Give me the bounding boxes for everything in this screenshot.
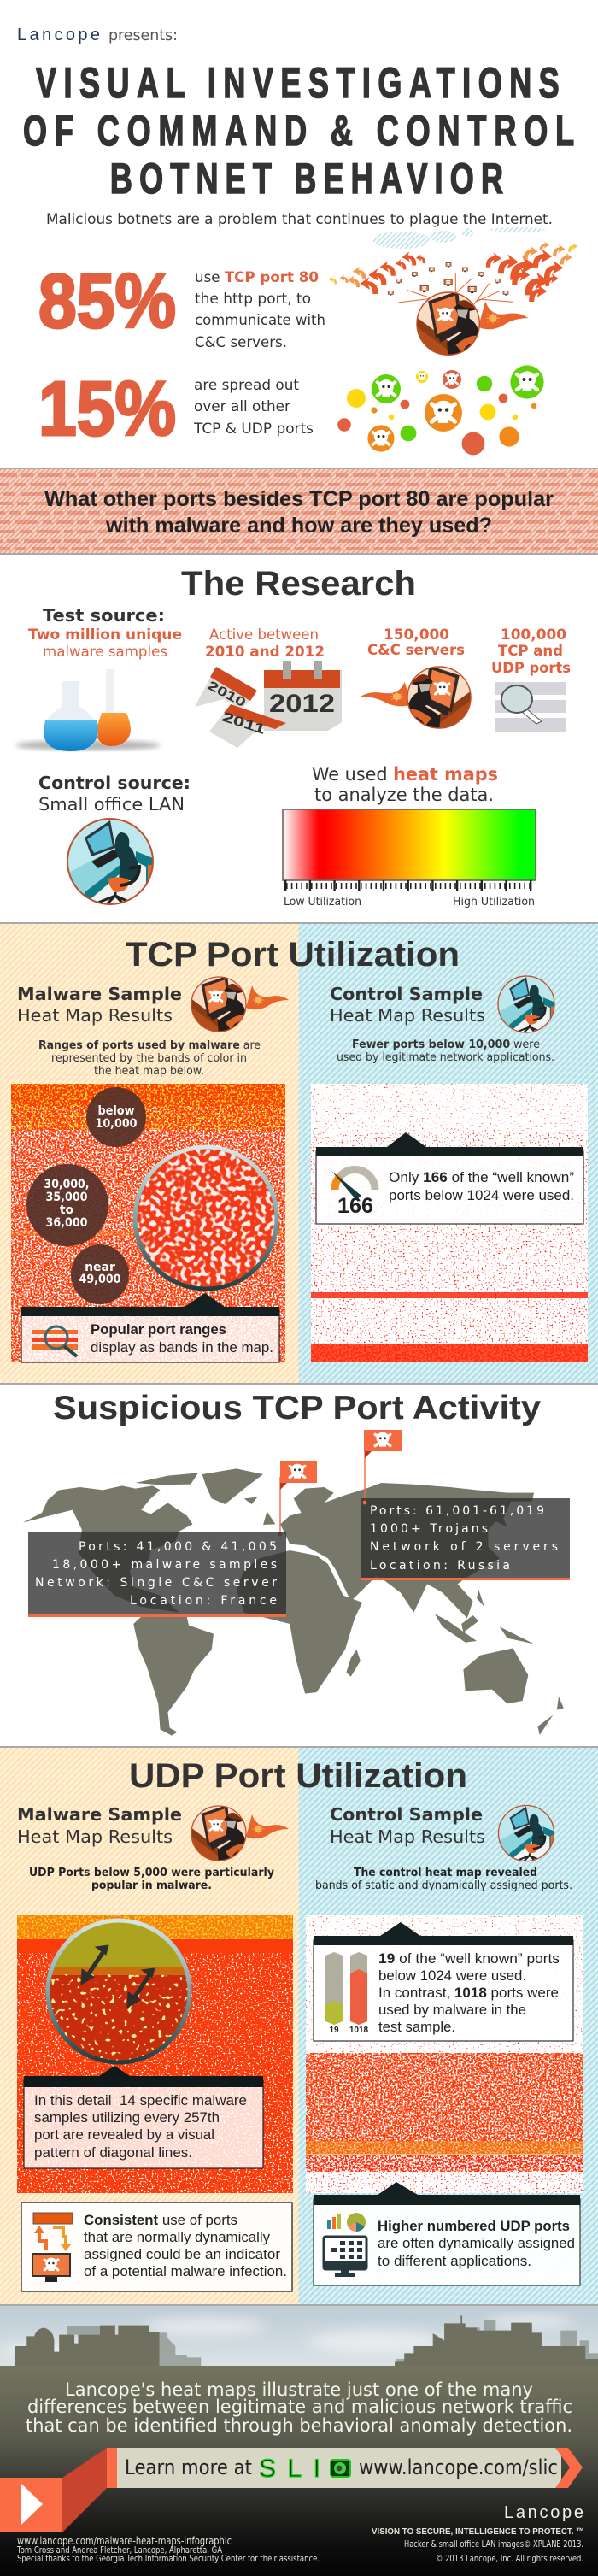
callout: 19 vs 1018 ports: test sample.: [378, 2020, 455, 2035]
malware description: [29, 1867, 274, 1892]
TCP UDP ports: UDP ports: [491, 660, 571, 677]
header: Lancope presents: Lancope: [17, 26, 100, 44]
callout: popular port ranges: Popular port ranges: [91, 1321, 226, 1338]
callout: higher numbered UDP ports: to different applications.: [378, 2254, 531, 2269]
test source: samples: malware samples: [43, 644, 167, 661]
bubble: 30,000 to 36,000: [26, 1164, 108, 1246]
icon: flasks: [15, 669, 161, 751]
stat: 15 percent: 15%: [38, 367, 176, 452]
stat: 85 percent: C&C servers.: [195, 334, 287, 351]
TCP UDP ports: TCP and: [498, 643, 563, 660]
icon: calendar pages: 2010: [205, 679, 248, 710]
stat: 15 percent: are spread out: [194, 377, 299, 394]
callout: France: [28, 1461, 317, 1617]
TCP UDP ports: [491, 626, 571, 677]
bubble: near 49,000: near: [85, 1261, 115, 1274]
bubble: near 49,000: 49,000: [79, 1273, 121, 1286]
title: BOTNET BEHAVIOR: [110, 156, 503, 203]
callout: popular port ranges: [21, 1293, 279, 1362]
heat map legend: [283, 764, 536, 909]
malware description: Ranges of ports used by malware are: [38, 1039, 261, 1052]
callout: France: Network: Single C&C server: [35, 1576, 277, 1590]
footer credits: [16, 2534, 320, 2564]
stat: 85 percent: the http port, to: [195, 291, 311, 308]
magnifier: diagonal pattern: [46, 1919, 191, 2064]
malware sample heading: Heat Map Results: [17, 1826, 173, 1847]
stat: 85 percent: 85%: [38, 259, 176, 344]
stat: 15 percent: over all other: [194, 398, 290, 415]
icon: botnet hacker with monitors and arrows: [328, 227, 577, 362]
dates: active between: Active between: [209, 626, 319, 644]
callout: France: Location: France: [130, 1594, 277, 1608]
heat map legend: High Utilization: [453, 896, 535, 909]
stat: 15 percent: TCP & UDP ports: [193, 421, 314, 438]
control sample heading: Heat Map Results: [330, 1826, 485, 1847]
control source: [38, 773, 191, 815]
callout: consistent use of ports: [21, 2203, 292, 2291]
footer branding: Lancope: [504, 2503, 583, 2522]
header: Lancope presents: [17, 26, 178, 44]
test source: samples: Test source:: [43, 605, 165, 626]
icon: calendar pages: [195, 661, 342, 748]
arrows: [81, 1945, 155, 2008]
callout: higher numbered UDP ports: Higher numbered UDP ports: [378, 2219, 570, 2234]
heat map: control UDP: [306, 1915, 583, 2193]
callout: diagonal lines: samples utilizing every 257th: [34, 2110, 220, 2126]
control description: The control heat map revealed: [354, 1867, 537, 1879]
callout: diagonal lines: [24, 2066, 263, 2168]
subtitle: Malicious botnets are a problem that continues to plague the Internet.: [46, 211, 553, 228]
closing statement: [26, 2379, 572, 2436]
stat: 85 percent: communicate with: [195, 312, 325, 329]
header: Lancope presents: presents:: [108, 26, 178, 44]
heading: UDP Port Utilization: UDP Port Utilization: [129, 1757, 467, 1795]
heat map legend: Low Utilization: [284, 896, 361, 909]
heading: Suspicious TCP Port Activity: Suspicious TCP Port Activity: [53, 1390, 541, 1426]
callout: Russia: 1000+ Trojans: [370, 1522, 488, 1536]
bubble: 30,000 to 36,000: 30,000,: [44, 1178, 89, 1191]
bar chart: 19 and 1018: [325, 1952, 369, 2035]
control sample heading: Control Sample: [330, 984, 483, 1004]
arrow banner: learn more: www.lancope.com/slic: [359, 2455, 558, 2479]
malware sample heading: Malware Sample: [17, 1804, 182, 1825]
C&C servers: 150,000: [384, 626, 449, 644]
control description: used by legitimate network applications.: [337, 1051, 554, 1064]
callout: consistent use of ports: that are normally dynamically: [84, 2230, 271, 2245]
control source: Control source:: [38, 773, 191, 793]
logo: SLIC: SLI: [259, 2455, 320, 2483]
footer branding: VISION TO SECURE, INTELLIGENCE TO PROTECT. ™: [372, 2526, 584, 2537]
bar chart: 19 and 1018: 19: [329, 2026, 339, 2035]
callout: diagonal lines: pattern of diagonal lines.: [34, 2145, 192, 2161]
C&C servers: C&C servers: [367, 642, 465, 659]
callout: 166 well known ports: Only 166 of the “well known”: [389, 1169, 574, 1185]
control sample heading: [330, 1804, 554, 1861]
malware description: the heat map below.: [94, 1065, 204, 1078]
icon: server to infected monitor: [32, 2213, 73, 2282]
malware description: UDP Ports below 5,000 were particularly: [29, 1867, 274, 1879]
control description: [337, 1038, 554, 1064]
icon: magnifier on ports: [495, 682, 566, 732]
malware sample heading: Heat Map Results: [17, 1005, 173, 1026]
heat map legend: We used heat maps: [312, 764, 498, 785]
arrow banner: learn more: Learn more at: [125, 2455, 252, 2479]
dates: active between: 2010 and 2012: [205, 644, 325, 661]
callout: popular port ranges: display as bands in the map.: [91, 1339, 273, 1356]
test source: samples: [28, 605, 182, 661]
callout: Russia: Ports: 61,001-61,019: [370, 1504, 544, 1518]
callout: consistent use of ports: Consistent use of ports: [84, 2213, 237, 2228]
callout: France: 18,000+ malware samples: [52, 1558, 277, 1572]
magnifier: heat map detail: [133, 1145, 278, 1291]
footer credits: Special thanks to the Georgia Tech Information Security Center for their assistance.: [17, 2554, 320, 2564]
stat: 85 percent: [38, 259, 325, 351]
control description: bands of static and dynamically assigned ports.: [315, 1879, 572, 1892]
footer branding: [372, 2503, 584, 2564]
heat map: malware TCP: [11, 1084, 285, 1362]
callout: Russia: Location: Russia: [370, 1559, 510, 1573]
banner: question: What other ports besides TCP port 80 are popular: [44, 487, 554, 511]
callout: diagonal lines: In this detail 14 specific malware: [34, 2093, 247, 2108]
footer credits: www.lancope.com/malware-heat-maps-infographic: [17, 2534, 232, 2547]
bubble: 30,000 to 36,000: 35,000: [46, 1191, 88, 1204]
callout: France: Ports: 41,000 & 41,005: [79, 1540, 277, 1554]
callout: 19 vs 1018 ports: In contrast, 1018 ports were: [378, 1985, 559, 2001]
heat map legend: to analyze the data.: [314, 785, 494, 805]
panel: UDP port utilization: [0, 1748, 598, 2304]
world map: [23, 1468, 564, 1736]
bar chart: 19 and 1018: 1018: [349, 2026, 369, 2035]
footer: sky and skyline: [0, 2306, 598, 2367]
callout: diagonal lines: port are revealed by a visual: [34, 2127, 214, 2143]
icon: scattered skull dots: [337, 365, 544, 455]
closing statement: Lancope's heat maps illustrate just one of the many: [65, 2379, 533, 2400]
callout: 19 vs 1018 ports: used by malware in the: [378, 2003, 526, 2018]
heading: TCP Port Utilization: TCP Port Utilization: [126, 936, 460, 973]
heat map: control TCP: [311, 1084, 588, 1362]
arrow banner: learn more: [0, 2448, 583, 2532]
C&C servers: [367, 626, 465, 659]
control sample heading: [330, 976, 554, 1032]
flag: France: [280, 1461, 317, 1490]
icon: hacker: [361, 666, 471, 734]
TCP UDP ports: 100,000: [501, 626, 566, 644]
dates: active between: [205, 626, 325, 661]
footer credits: Tom Cross and Andrea Fletcher, Lancope, Alpharetta, GA: [16, 2545, 223, 2555]
malware description: [38, 1039, 261, 1078]
closing statement: differences between legitimate and malicious network traffic: [27, 2397, 572, 2417]
icon: calendar pages: 2011: [220, 710, 267, 738]
bubble: below 10,000: [86, 1087, 146, 1147]
bubble: below 10,000: below: [97, 1104, 135, 1118]
closing statement: that can be identified through behavioral anomaly detection.: [26, 2415, 572, 2436]
malware description: represented by the bands of color in: [51, 1052, 247, 1065]
callout: Russia: [361, 1430, 570, 1580]
callout: Russia: Network of 2 servers: [370, 1540, 558, 1554]
bubble: near 49,000: [71, 1244, 129, 1304]
title: [23, 60, 574, 203]
control sample heading: Heat Map Results: [330, 1005, 485, 1026]
icon: gauge: [331, 1169, 375, 1200]
flag: Russia: [364, 1430, 402, 1458]
heading: The Research: The Research: [181, 565, 416, 603]
logo: SLIC: [259, 2455, 350, 2483]
control description: Fewer ports below 10,000 were: [352, 1038, 540, 1051]
stat: 15 percent: [38, 367, 314, 452]
control description: [315, 1867, 572, 1892]
malware sample heading: Malware Sample: [17, 984, 182, 1004]
banner: question: [0, 468, 598, 555]
callout: 19 vs 1018 ports: 19 of the “well known” ports: [378, 1951, 560, 1967]
footer: dark background: [0, 2366, 598, 2576]
callout: 166 well known ports: [316, 1132, 583, 1224]
bubble: below 10,000: 10,000: [96, 1117, 138, 1131]
icon: monitor and charts: [324, 2213, 366, 2277]
icon: small office: [67, 819, 153, 904]
control source: Small office LAN: [38, 794, 185, 815]
callout: consistent use of ports: of a potential malware infection.: [84, 2264, 287, 2279]
malware sample heading: [17, 976, 289, 1037]
malware sample heading: [17, 1804, 289, 1866]
title: OF COMMAND & CONTROL: [23, 108, 574, 155]
bubble: 30,000 to 36,000: to: [60, 1203, 74, 1217]
callout: higher numbered UDP ports: are often dynamically assigned: [378, 2236, 575, 2251]
callout: 166 well known ports: 166: [337, 1194, 373, 1218]
callout: 166 well known ports: ports below 1024 were used.: [389, 1187, 574, 1203]
control sample heading: Control Sample: [330, 1804, 483, 1825]
banner: question: with malware and how are they used?: [105, 514, 492, 538]
callout: higher numbered UDP ports: [314, 2182, 580, 2285]
callout: 19 vs 1018 ports: below 1024 were used.: [378, 1968, 526, 1984]
bubble: 30,000 to 36,000: 36,000: [46, 1216, 88, 1230]
title: VISUAL INVESTIGATIONS: [36, 60, 560, 107]
panel: TCP port utilization: [0, 924, 598, 1383]
icon: calendar pages: 2012: [269, 690, 335, 718]
malware description: popular in malware.: [91, 1879, 212, 1892]
callout: consistent use of ports: assigned could be an indicator: [84, 2247, 281, 2262]
callout: 19 vs 1018 ports: [314, 1922, 573, 2041]
test source: samples: Two million unique: [28, 626, 182, 644]
heat map: malware UDP: [17, 1915, 293, 2193]
stat: 85 percent: use TCP port 80: [195, 269, 319, 286]
